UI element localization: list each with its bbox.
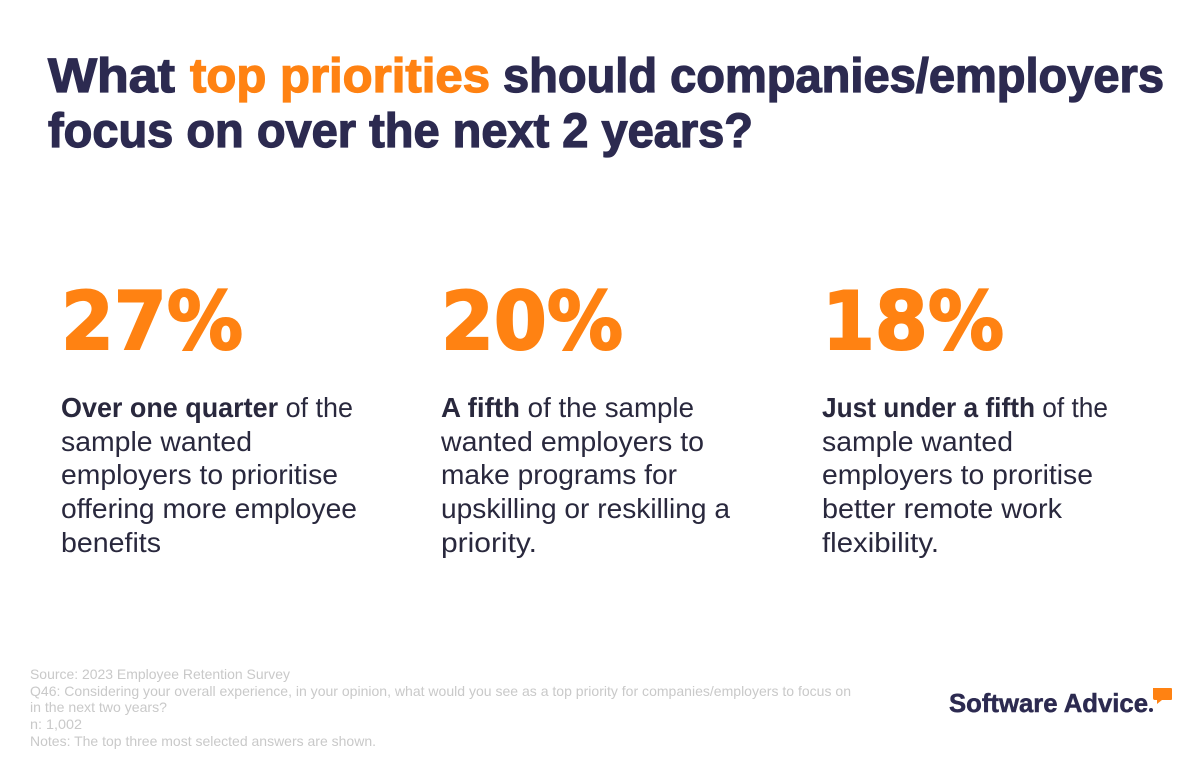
text block: employee benefits: benefits <box>61 527 161 558</box>
text block: employee benefits: offering more employee <box>61 493 357 524</box>
source notes: Notes: The top three most selected answers are shown. <box>30 733 376 749</box>
logo mark: orange speech bubble <box>1153 688 1172 704</box>
text block: remote work: flexibility. <box>822 527 939 558</box>
source notes: Source: 2023 Employee Retention Survey <box>30 666 290 682</box>
title: focus on over the next 2 years? <box>48 105 753 158</box>
title: should companies/employers <box>503 50 1164 103</box>
title: top priorities <box>190 50 490 103</box>
stat: 27%: 27% <box>61 275 243 368</box>
text block: upskilling: priority. <box>441 527 537 558</box>
panel: 27 percent <box>61 275 357 558</box>
text block: employee benefits <box>61 392 357 558</box>
text block: upskilling: wanted employers to <box>440 426 704 457</box>
source notes: n: 1,002 <box>30 716 82 732</box>
title <box>48 50 1164 158</box>
text block: upskilling: A fifth of the sample <box>441 392 694 423</box>
text block: employee benefits: Over one quarter of the <box>61 392 353 423</box>
text block: remote work: better remote work <box>822 493 1062 524</box>
text block: upskilling: make programs for <box>441 459 677 490</box>
stat: 20%: 20% <box>441 275 623 368</box>
text block: employee benefits: employers to prioritise <box>61 459 338 490</box>
text block: employee benefits: sample wanted <box>61 426 252 457</box>
source notes: Q46: Considering your overall experience, in your opinion, what would you see as a top priority for companies/employers to focus on <box>30 683 851 699</box>
panel: 18 percent <box>822 275 1108 558</box>
logo: Software Advice: Software Advice <box>949 688 1148 718</box>
text block: upskilling <box>440 392 731 558</box>
source notes <box>30 666 851 749</box>
stat: 18%: 18% <box>822 275 1004 368</box>
text block: remote work <box>822 392 1108 558</box>
text block: remote work: Just under a fifth of the <box>822 392 1108 423</box>
text block: upskilling: upskilling or reskilling a <box>441 493 731 524</box>
title: What <box>48 50 175 103</box>
text block: remote work: employers to proritise <box>822 459 1093 490</box>
source notes: in the next two years? <box>30 699 167 715</box>
panel: 20 percent <box>440 275 731 558</box>
text block: remote work: sample wanted <box>822 426 1013 457</box>
